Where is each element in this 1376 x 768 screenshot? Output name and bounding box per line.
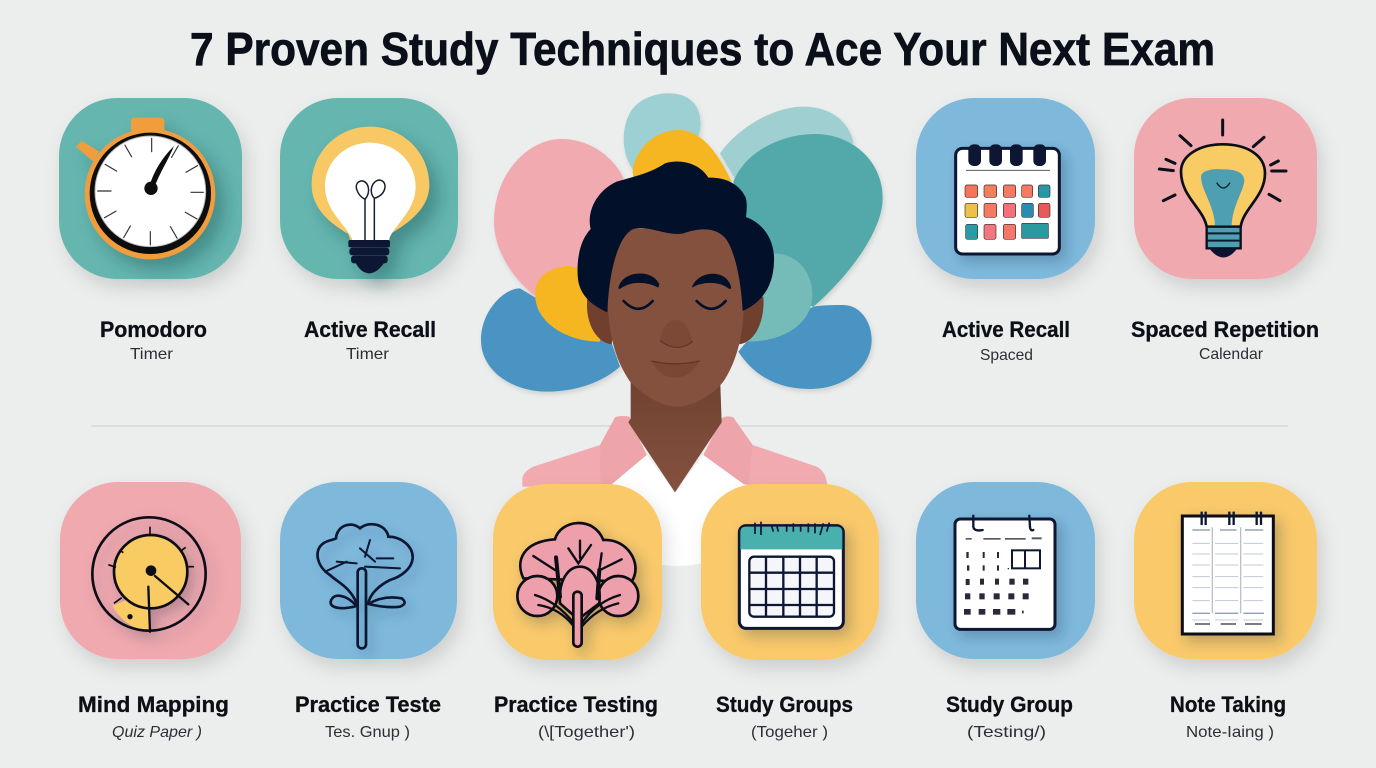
label: Pomodoro [100, 317, 207, 342]
sublabel: Spaced [980, 347, 1033, 364]
icon: pink tree [517, 523, 638, 647]
icon: glowing light bulb [1159, 120, 1286, 257]
label: Spaced Repetition [1131, 317, 1319, 342]
tile [916, 482, 1095, 659]
icon: light bulb [312, 127, 429, 273]
nose [660, 320, 692, 347]
sublabel: Timer [346, 346, 390, 363]
sublabel: (Togeher ) [751, 724, 828, 741]
closed eyes [624, 301, 726, 309]
label: Active Recall [304, 317, 436, 342]
tile [493, 484, 662, 660]
label: Study Groups [716, 692, 853, 717]
tile [1134, 482, 1317, 659]
face [608, 228, 744, 407]
sublabel: Timer [130, 346, 174, 363]
hair [578, 161, 774, 312]
tile [60, 482, 241, 659]
central figure: person with colourful thought shapes [481, 93, 883, 566]
sublabel: (\[Together') [538, 724, 635, 741]
tile [280, 482, 457, 659]
thought blobs [481, 93, 883, 392]
icon: grid calendar [739, 522, 843, 628]
tile [59, 98, 242, 279]
panel: Pomodoro [59, 98, 242, 363]
sublabel: Note-Iaing ) [1186, 724, 1274, 741]
tile [280, 98, 458, 279]
label: Note Taking [1170, 692, 1286, 717]
neck [628, 375, 722, 492]
icon: colourful calendar [956, 144, 1059, 254]
sublabel: Quiz Paper ) [112, 724, 202, 741]
tile [701, 484, 879, 660]
panel: Practice Teste [280, 482, 457, 741]
label: Practice Testing [494, 692, 658, 717]
panel: Practice Testing [493, 484, 662, 741]
label: Practice Teste [295, 692, 441, 717]
icon: stopwatch [76, 118, 215, 259]
label: Mind Mapping [78, 692, 229, 717]
panel: Spaced Repetition [1131, 98, 1319, 363]
tile [916, 98, 1095, 279]
label: Study Group [946, 692, 1073, 717]
icon: month calendar [955, 516, 1055, 629]
panel: Active Recall (Timer) [280, 98, 458, 363]
tile [1134, 98, 1317, 279]
mouth [652, 361, 699, 378]
panel: Study Groups [701, 484, 879, 741]
eyebrows [618, 273, 731, 289]
title: 7 Proven Study Techniques to Ace Your Next Exam [190, 23, 1215, 75]
sublabel: (Testing/) [967, 724, 1046, 741]
icon: outlined tree [318, 524, 413, 648]
panel: Active Recall (Spaced) [916, 98, 1095, 364]
panel: Study Group [916, 482, 1095, 741]
ears [587, 297, 764, 344]
shirt [522, 416, 827, 566]
icon: gauge dial [92, 517, 206, 632]
icon: notepad [1182, 512, 1273, 634]
sublabel: Calendar [1199, 346, 1264, 363]
sublabel: Tes. Gnup ) [325, 724, 410, 741]
panel: Mind Mapping [60, 482, 241, 741]
label: Active Recall [942, 317, 1070, 342]
panel: Note Taking [1134, 482, 1317, 741]
